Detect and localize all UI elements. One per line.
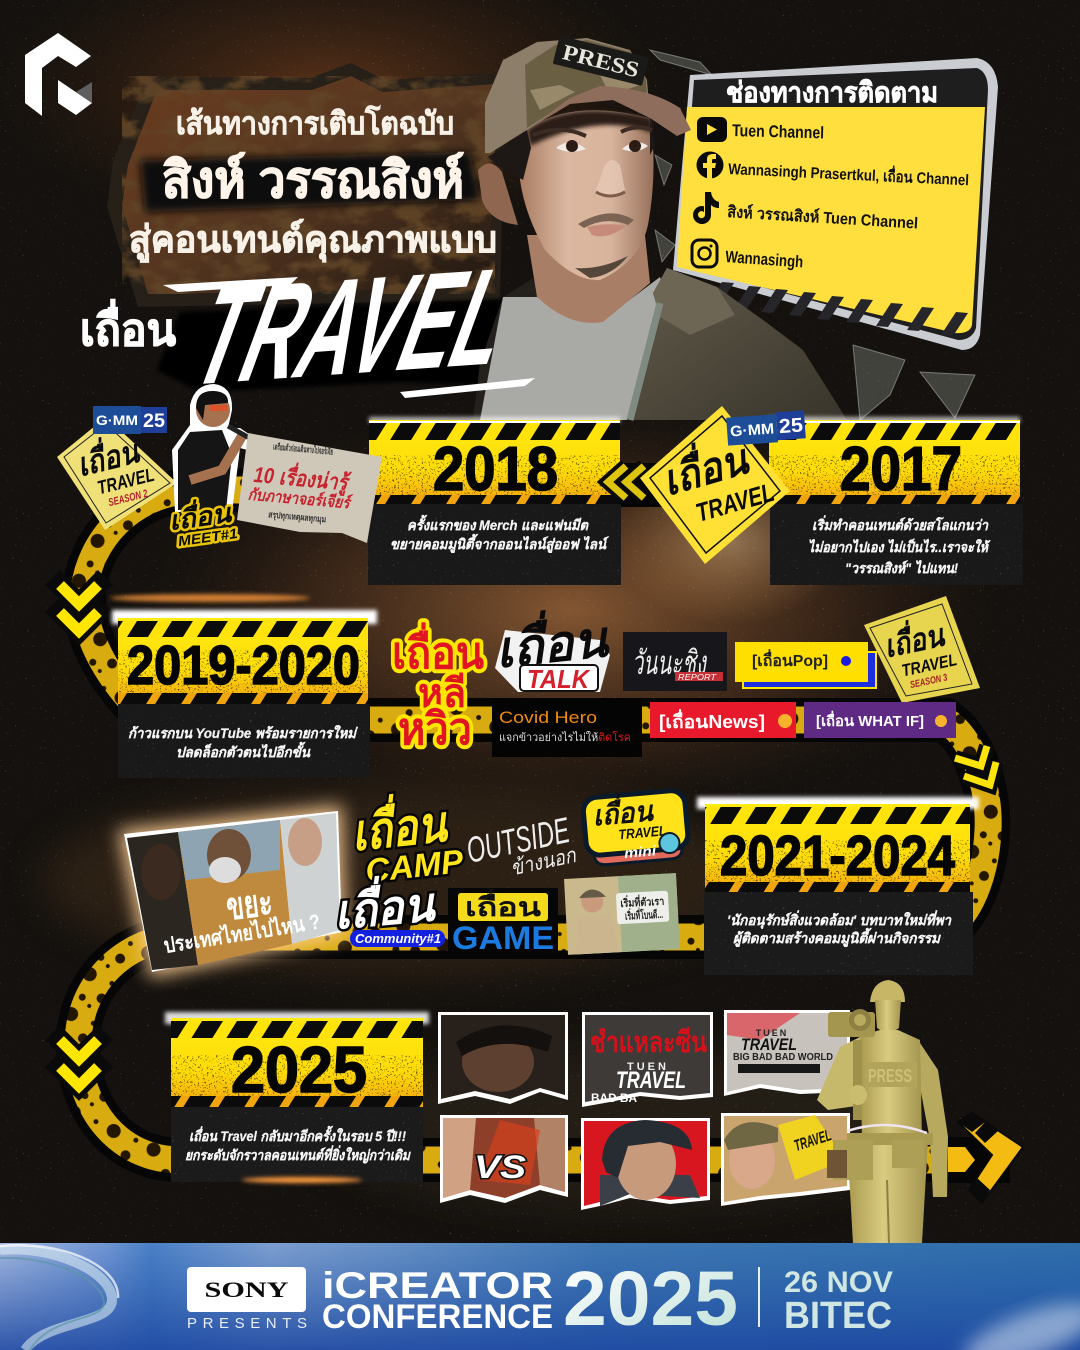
broken glass and banknotes decoration <box>650 50 975 420</box>
logo: Wan Na Ching report <box>623 632 727 691</box>
card: 2019-2020: ก้าวแรกบน YouTube พร้อมรายการใหม่ <box>128 725 358 741</box>
label: Tuen Pop <box>735 642 876 688</box>
card: 2018: 2018 <box>433 435 558 504</box>
row: instagram: Wannasingh <box>725 248 804 271</box>
face <box>520 110 654 280</box>
thumbnail: Big Bad Bad World: TUEN <box>756 1028 788 1038</box>
logo: Wan Na Ching report: วันนะชิง <box>632 644 708 681</box>
logo: Tuen Travel diamond: TRAVEL <box>692 477 778 528</box>
moustache and mouth <box>578 213 634 228</box>
sony logo: SONY <box>204 1277 289 1302</box>
heading: title text: สู่คอนเทนต์คุณภาพแบบ <box>129 219 497 263</box>
nose shade <box>596 160 625 198</box>
thumbnail: Chamlae Seen: TUEN <box>627 1061 669 1073</box>
heading: Tuen Travel wordmark: TRAVEL <box>174 238 535 415</box>
paper note: 10 things: สรุปทุกเหตุผลทุกมุม <box>268 509 327 525</box>
logo: season 2 diamond <box>57 417 177 530</box>
logo: meet#1: เถื่อน <box>167 494 234 536</box>
thumbnail: illustrated host: TRAVEL <box>792 1127 834 1155</box>
event year: 2025 <box>563 1256 738 1342</box>
row: tiktok <box>693 192 919 233</box>
neck <box>527 235 650 323</box>
logo: Tuen Travel diamond: เถื่อน <box>655 429 755 504</box>
logo: Tuen Travel mini: mini <box>623 842 658 861</box>
heading: Tuen Travel wordmark: เถื่อน <box>80 299 176 355</box>
ear <box>478 163 518 225</box>
card: 2019-2020 <box>110 594 377 778</box>
right arm <box>918 1040 948 1197</box>
row: tiktok: สิงห์ วรรณสิงห์ Tuen Channel <box>727 202 919 233</box>
paper note: 10 things <box>237 433 382 543</box>
logo: Tuen Travel mini <box>582 788 690 866</box>
card: 2017: ไม่อยากไปเอง ไม่เป็นไร..เราจะให้ <box>808 538 991 555</box>
card: 2017: "วรรณสิงห์" ไปแทน! <box>845 560 958 576</box>
logo: season 3 diamond: SEASON 3 <box>909 672 949 691</box>
logo: Tuen Travel diamond <box>640 406 790 564</box>
thumbnail: illustrated host <box>721 1113 850 1206</box>
card: 2017 <box>769 417 1023 585</box>
vest <box>860 1030 922 1140</box>
logo: GMM25 small badge: G·MM <box>96 412 138 428</box>
sign hazard stripes <box>707 282 968 336</box>
arrow: chevrons toward 2018 <box>608 466 644 498</box>
heading: title text: เส้นทางการเติบโตฉบับ <box>176 105 454 141</box>
cap patch: press <box>553 36 649 86</box>
paper note: 10 things: กับภาษาจอร์เจียร์ <box>247 485 354 513</box>
belt and pouches <box>847 1133 933 1145</box>
thumbnail: Big Bad Bad World <box>724 1010 850 1096</box>
sign: follow channels panel <box>673 58 998 350</box>
gimbal and camera <box>853 1040 862 1120</box>
legs <box>847 1140 928 1243</box>
thumbnail: Big Bad Bad World: BIG BAD BAD WORLD <box>733 1051 833 1063</box>
logo: Tuen Camp: CAMP <box>364 842 466 889</box>
card: 2025: 2025 <box>231 1033 367 1106</box>
card: 2019-2020: ปลดล็อกตัวตนไปอีกขั้น <box>176 741 311 760</box>
heading backing: black brush stroke <box>157 298 540 392</box>
label: Covid Hero <box>492 698 642 757</box>
logo: brand mark <box>25 33 92 116</box>
event date and venue: BITEC <box>784 1295 892 1337</box>
photo: Waste Journey documentary poster <box>118 805 346 978</box>
thumbnail: Big Bad Bad World: TRAVEL <box>741 1035 797 1054</box>
logo: Tuen Game: GAME <box>452 920 554 956</box>
row: youtube: Tuen Channel <box>732 121 824 142</box>
logo: season 3 diamond: TRAVEL <box>900 650 959 680</box>
thumbnail: Chamlae Seen: ชำแหละซีน <box>590 1027 707 1059</box>
logo: season 3 diamond: เถื่อน <box>880 612 948 664</box>
heading: title text <box>129 105 497 263</box>
thumbnail: helmet portrait on red <box>581 1118 710 1210</box>
logo: Outside: OUTSIDE <box>463 809 574 871</box>
logo: GMM25 small badge: 25 <box>143 411 165 432</box>
logo: GMM25 badge: G·MM <box>730 420 775 440</box>
row: youtube <box>697 117 824 142</box>
logo: Tuen Community: เถื่อน <box>331 870 438 939</box>
gray t-shirt <box>480 277 668 420</box>
title plaque <box>107 63 505 307</box>
cap patch: press: PRESS <box>560 39 642 82</box>
banner: iCreator Conference footer <box>0 1243 1080 1350</box>
statue: golden press figure with camera <box>817 980 948 1243</box>
road: winding hazard-tape timeline path <box>78 485 1000 1160</box>
eyebrows <box>533 127 652 136</box>
card: 2025: ยกระดับจักรวาลคอนเทนต์ที่ยิ่งใหญ่กว่าเดิม <box>185 1145 412 1164</box>
thumbnail: old man in cap <box>438 1012 568 1104</box>
card: 2021-2024: 2021-2024 <box>720 824 955 888</box>
sony logo <box>187 1267 307 1332</box>
logo: Outside <box>463 809 579 888</box>
statue: golden press figure with camera: PRESS <box>868 1066 912 1086</box>
event name: iCREATOR <box>322 1265 553 1306</box>
card: 2025: เถื่อน Travel กลับมาอีกครั้งในรอบ 5 ปี!!! <box>189 1125 406 1144</box>
card: 2017: เริ่มทำคอนเทนต์ด้วยสโลแกนว่า <box>812 515 989 533</box>
sign heading: ช่องทางการติดตาม <box>726 77 938 108</box>
goatee <box>575 256 628 278</box>
logo: Tuen Community: Community#1 <box>355 932 441 946</box>
card: 2018: ครั้งแรกของ Merch และแฟนมีต <box>407 514 589 533</box>
logo: Outside: ข้างนอก <box>508 844 579 880</box>
logo: season 2 diamond: SEASON 2 <box>107 488 149 509</box>
logo: Tuen Talk: เถื่อน <box>492 603 612 678</box>
logo: GMM25 badge <box>726 410 806 446</box>
logo: season 2 diamond: TRAVEL <box>95 465 157 499</box>
logo: Tuen Game <box>448 888 558 956</box>
cap crown <box>485 38 650 153</box>
logo: Tuen Talk: TALK <box>527 664 591 694</box>
logo: GMM25 small badge <box>93 406 167 434</box>
photo: host thumbnail <box>564 873 680 955</box>
logo: Tuen Lee Wiw: หลี <box>418 672 466 716</box>
label: Covid Hero: Covid Hero <box>499 708 597 727</box>
event name: CONFERENCE <box>322 1298 553 1336</box>
arrow: chevrons down left 2 <box>60 1040 98 1086</box>
photo: host thumbnail: เริ่มที่โบนดี... <box>625 906 663 923</box>
logo: GMM25 badge: 25 <box>778 414 804 438</box>
logo: Wan Na Ching report: REPORT <box>678 672 717 682</box>
paper note: 10 things: 10 เรื่องน่ารู้ <box>252 458 353 497</box>
thumbnail: versus <box>440 1115 568 1203</box>
arrow: chevrons down left 1 <box>60 585 98 631</box>
card: 2019-2020: 2019-2020 <box>127 634 360 696</box>
portrait: man in press cap and hoodie <box>473 36 847 420</box>
logo: Tuen Lee Wiw: หวิว <box>398 705 472 754</box>
photo: Waste Journey documentary poster: ขยะ <box>224 882 275 929</box>
hair <box>488 120 655 180</box>
arrow: final hazard arrow <box>945 1113 1023 1203</box>
card: 2018: ขยายคอมมูนิตี้จากออนไลน์สู่ออฟ ไลน์ <box>390 533 610 553</box>
event name <box>322 1265 553 1336</box>
logo: Tuen Travel mini: เถื่อน <box>591 790 656 832</box>
label: Tuen What If: [เถื่อน WHAT IF] <box>816 710 924 730</box>
logo: Tuen Game: เถื่อน <box>465 888 541 922</box>
hoodie <box>633 268 847 420</box>
heading: title text: สิงห์ วรรณสิงห์ <box>162 152 464 208</box>
card: 2021-2024: ผู้ติดตามสร้างคอมมูนิตี้ผ่านกิจกรรม <box>733 927 942 947</box>
event date and venue: 26 NOV <box>784 1266 893 1299</box>
logo: Tuen Camp: เถื่อน <box>348 788 451 861</box>
photo: Waste Journey documentary poster: ประเทศไทยไปไหน ? <box>162 909 322 958</box>
thumbnail: versus: VS <box>474 1149 527 1185</box>
speaker photo: man with microphone <box>172 384 268 512</box>
logo: season 3 diamond <box>864 596 980 703</box>
heading: Tuen Travel wordmark <box>80 238 535 415</box>
sony logo: PRESENTS <box>187 1315 307 1332</box>
logo: season 2 diamond: เถื่อน <box>72 428 143 483</box>
logo: meet#1: MEET#1 <box>177 525 239 549</box>
paper note: 10 things: เตรียมตัวก่อนเดินทางไปจอร์เจีย <box>273 441 334 457</box>
event date and venue <box>784 1266 893 1337</box>
cap brim <box>527 86 691 136</box>
card: 2025 <box>165 1012 429 1183</box>
arrow: chevrons right side <box>955 746 996 785</box>
label: Tuen News: [เถื่อนNews] <box>659 709 765 732</box>
logo: meet#1 <box>167 493 239 550</box>
thumbnail: Chamlae Seen: TRAVEL <box>616 1067 686 1094</box>
thumbnail: Chamlae Seen: BAD BA <box>591 1091 637 1105</box>
logo: Tuen Travel mini: TRAVEL <box>618 822 667 842</box>
label: Covid Hero: แจกข้าวอย่างไรไม่ให้ติดโรค <box>499 730 631 744</box>
left jacket <box>473 278 540 420</box>
card: 2021-2024 <box>697 797 979 975</box>
label: Tuen News <box>650 702 796 738</box>
row: facebook <box>696 152 970 189</box>
label: Tuen What If <box>804 702 956 738</box>
brim shadow <box>527 110 652 146</box>
logo: Tuen Lee Wiw: เถื่อน <box>392 622 484 678</box>
label: Tuen Pop: [เถื่อนPop] <box>752 649 828 670</box>
row: facebook: Wannasingh Prasertkul, เถื่อน Channel <box>728 157 970 189</box>
card: 2021-2024: 'นักอนุรักษ์สิ่งแวดล้อม' บทบาทใหม่ที่พา <box>727 910 952 929</box>
row: instagram <box>692 240 804 271</box>
logo: Tuen Lee Wiw <box>392 622 484 754</box>
thumbnail: Chamlae Seen <box>582 1012 713 1107</box>
left arm <box>817 1036 866 1110</box>
logo: Tuen Camp <box>348 786 466 890</box>
photo: host thumbnail: เริ่มที่ตัวเรา <box>620 893 665 910</box>
eyes <box>556 142 648 152</box>
card: 2018 <box>368 417 621 585</box>
card: 2017: 2017 <box>840 435 962 504</box>
banner decoration: glass ribbon <box>0 1245 118 1350</box>
